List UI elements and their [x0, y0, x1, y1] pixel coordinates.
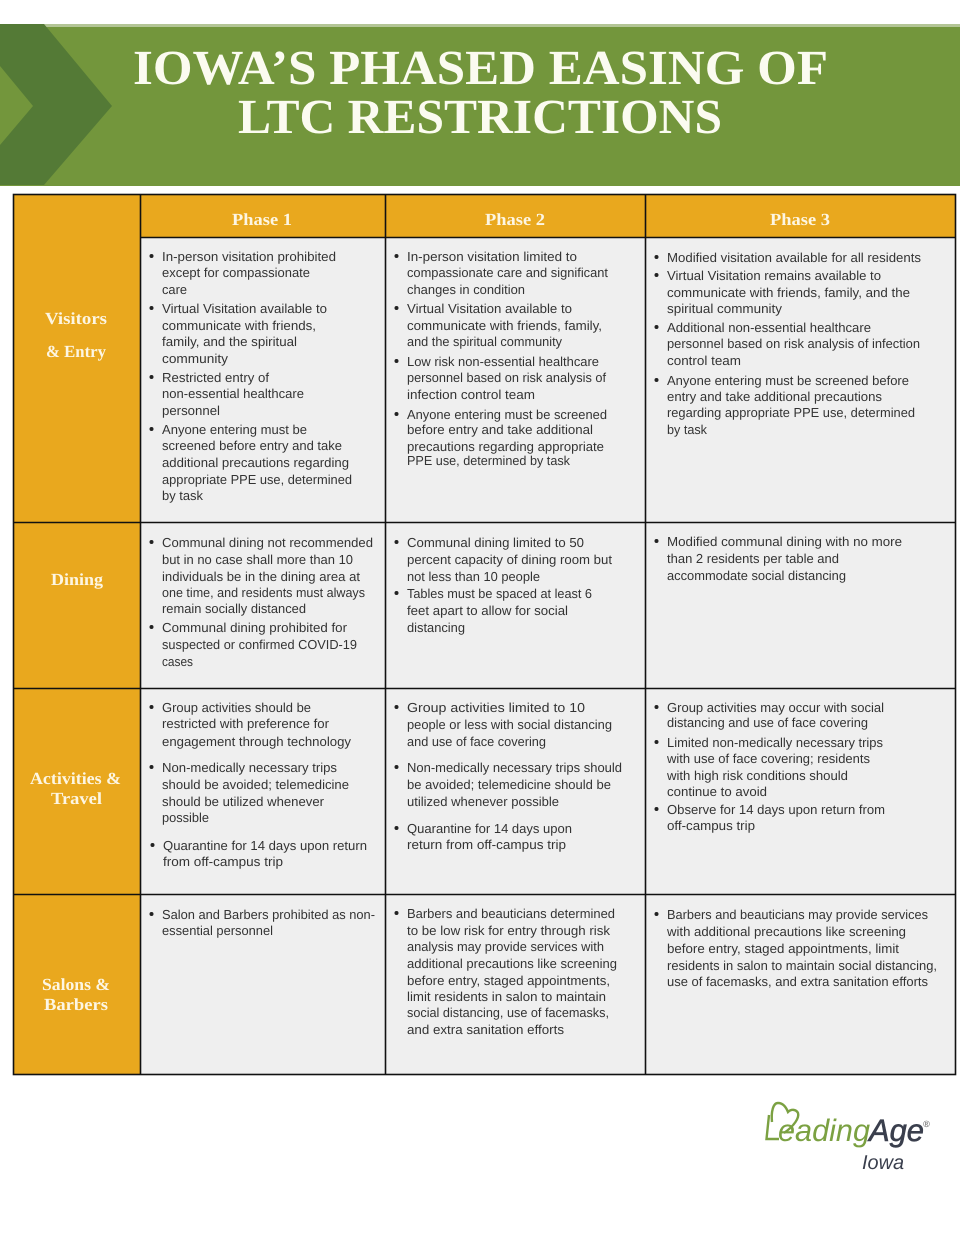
salons phase 2: to be low risk for entry through risk — [407, 923, 610, 938]
activities phase 2: and use of face covering — [407, 734, 546, 749]
dining phase 1: cases — [162, 654, 193, 669]
visitors phase 2: Low risk non-essential healthcare — [407, 354, 599, 369]
visitors phase 3: Modified visitation available for all residents — [667, 250, 922, 265]
column headers: Phase 1 — [232, 210, 292, 229]
activities phase 3: with high risk conditions should — [666, 768, 848, 783]
dining phase 1: but in no case shall more than 10 — [162, 552, 353, 567]
visitors phase 3: Additional non-essential healthcare — [667, 320, 871, 335]
visitors phase 1: care — [162, 282, 187, 297]
row label: salons and barbers: Barbers — [44, 995, 108, 1014]
activities phase 1: from off-campus trip — [163, 854, 283, 869]
table grid — [13, 194, 956, 1075]
dining phase 2: Tables must be spaced at least 6 — [407, 586, 592, 601]
visitors phase 1: except for compassionate — [162, 265, 310, 280]
row label: activities and travel — [30, 769, 121, 808]
dining phase 1 — [150, 535, 373, 669]
visitors phase 3: communicate with friends, family, and the — [667, 285, 910, 300]
visitors phase 2: PPE use, determined by task — [407, 453, 570, 468]
visitors phase 2: In-person visitation limited to — [407, 249, 577, 264]
visitors phase 1: In-person visitation prohibited — [162, 249, 336, 264]
row label: visitors and entry: Visitors — [45, 309, 107, 328]
visitors phase 3: regarding appropriate PPE use, determined — [667, 405, 915, 420]
visitors phase 2 — [394, 249, 608, 468]
salons phase 2: analysis may provide services with — [407, 939, 604, 954]
icon: chevron — [0, 24, 112, 185]
activities phase 3: Observe for 14 days upon return from — [667, 802, 885, 817]
visitors phase 3: control team — [667, 353, 741, 368]
banner — [0, 24, 960, 186]
column headers — [232, 210, 830, 229]
visitors phase 1: Virtual Visitation available to — [162, 301, 327, 316]
dining phase 2: distancing — [407, 620, 465, 635]
row label: dining: Dining — [51, 570, 104, 589]
dining phase 1: one time, and residents must always — [162, 585, 365, 600]
activities phase 1: possible — [162, 810, 209, 825]
activities phase 3: distancing and use of face covering — [667, 715, 868, 730]
activities phase 2: return from off-campus trip — [407, 837, 566, 852]
activities phase 1 — [150, 700, 367, 869]
visitors phase 1: personnel — [162, 403, 220, 418]
column headers: Phase 2 — [485, 210, 545, 229]
salons phase 2: additional precautions like screening — [407, 956, 617, 971]
visitors phase 2: personnel based on risk analysis of — [407, 370, 606, 385]
visitors phase 1: Anyone entering must be — [162, 422, 307, 437]
visitors phase 1: family, and the spiritual — [162, 334, 297, 349]
activities phase 1: restricted with preference for — [162, 716, 330, 731]
salons phase 2: and extra sanitation efforts — [407, 1022, 565, 1037]
visitors phase 1: communicate with friends, — [162, 318, 316, 333]
row label: visitors and entry: & Entry — [46, 342, 106, 361]
salons phase 2: limit residents in salon to maintain — [407, 989, 606, 1004]
visitors phase 3 — [654, 250, 922, 437]
activities phase 3: with use of face covering; residents — [666, 751, 870, 766]
visitors phase 2: infection control team — [407, 387, 535, 402]
dining phase 1: remain socially distanced — [162, 601, 306, 616]
activities phase 2: Non-medically necessary trips should — [407, 760, 622, 775]
salons phase 3: use of facemasks, and extra sanitation efforts — [667, 974, 928, 989]
salons phase 1: essential personnel — [162, 923, 273, 938]
visitors phase 3: Anyone entering must be screened before — [667, 373, 909, 388]
dining phase 2: feet apart to allow for social — [407, 603, 568, 618]
visitors phase 1: by task — [162, 488, 203, 503]
logo: LeadingAge Iowa: Iowa — [862, 1152, 904, 1174]
activities phase 1: Non-medically necessary trips — [162, 760, 337, 775]
visitors phase 3: Virtual Visitation remains available to — [667, 268, 881, 283]
icon: heart and L — [766, 1103, 798, 1139]
visitors phase 3: entry and take additional precautions — [667, 389, 882, 404]
visitors phase 3: spiritual community — [667, 301, 783, 316]
activities phase 2: people or less with social distancing — [407, 717, 612, 732]
activities phase 3: continue to avoid — [667, 784, 767, 799]
visitors phase 1: community — [162, 351, 229, 366]
salons phase 3: Barbers and beauticians may provide services — [667, 907, 928, 922]
activities phase 2: utilized whenever possible — [407, 794, 559, 809]
title — [133, 40, 828, 144]
visitors phase 2: compassionate care and significant — [407, 265, 608, 280]
activities phase 1: Group activities should be — [162, 700, 311, 715]
dining phase 2: Communal dining limited to 50 — [407, 535, 584, 550]
salons phase 3: with additional precautions like screening — [666, 924, 906, 939]
visitors phase 2: precautions regarding appropriate — [407, 439, 604, 454]
visitors phase 1: screened before entry and take — [162, 438, 342, 453]
logo: LeadingAge Iowa: eading — [778, 1113, 870, 1148]
visitors phase 2: Virtual Visitation available to — [407, 301, 572, 316]
row label: salons and barbers: Salons & — [42, 975, 110, 994]
visitors phase 1: appropriate PPE use, determined — [162, 472, 352, 487]
dining phase 1: Communal dining prohibited for — [162, 620, 348, 635]
row label: activities and travel: Activities & — [30, 769, 121, 788]
visitors phase 2: before entry and take additional — [407, 422, 593, 437]
activities phase 2 — [394, 700, 622, 852]
logo: LeadingAge Iowa: Age — [867, 1113, 924, 1148]
dining phase 3: than 2 residents per table and — [667, 551, 839, 566]
column headers: Phase 3 — [770, 210, 830, 229]
activities phase 3: off-campus trip — [667, 818, 755, 833]
dining phase 3: Modified communal dining with no more — [667, 534, 902, 549]
activities phase 1: should be utilized whenever — [162, 794, 325, 809]
activities phase 1: engagement through technology — [162, 734, 351, 749]
salons phase 3: residents in salon to maintain social distancing, — [667, 958, 937, 973]
salons phase 2: Barbers and beauticians determined — [407, 906, 615, 921]
dining phase 3 — [654, 534, 902, 583]
dining phase 2 — [394, 535, 612, 635]
visitors phase 1: additional precautions regarding — [162, 455, 349, 470]
logo: LeadingAge Iowa — [766, 1103, 930, 1174]
activities phase 2: Quarantine for 14 days upon — [407, 821, 572, 836]
salons phase 3 — [654, 907, 937, 989]
dining phase 1: individuals be in the dining area at — [162, 569, 360, 584]
salons phase 1: Salon and Barbers prohibited as non- — [162, 907, 375, 922]
visitors phase 3: by task — [667, 422, 707, 437]
salons phase 3: before entry, staged appointments, limit — [667, 941, 899, 956]
visitors phase 1: non-essential healthcare — [162, 386, 304, 401]
activities phase 1: should be avoided; telemedicine — [162, 777, 349, 792]
dining phase 2: percent capacity of dining room but — [407, 552, 612, 567]
visitors phase 1: Restricted entry of — [162, 370, 269, 385]
dining phase 1: suspected or confirmed COVID-19 — [162, 637, 357, 652]
salons phase 1 — [150, 907, 375, 938]
visitors phase 3: personnel based on risk analysis of infection — [667, 336, 920, 351]
title: LTC RESTRICTIONS — [238, 89, 722, 144]
visitors phase 2: changes in condition — [407, 282, 525, 297]
row label: salons and barbers — [42, 975, 110, 1014]
salons phase 2: before entry, staged appointments, — [407, 973, 610, 988]
activities phase 1: Quarantine for 14 days upon return — [163, 838, 367, 853]
dining phase 1: Communal dining not recommended — [162, 535, 373, 550]
visitors phase 2: and the spiritual community — [407, 334, 562, 349]
salons phase 2 — [394, 906, 617, 1037]
activities phase 2: be avoided; telemedicine should be — [407, 777, 611, 792]
visitors phase 1 — [150, 249, 352, 503]
activities phase 3 — [654, 700, 885, 833]
row label: visitors and entry — [45, 309, 107, 361]
visitors phase 2: Anyone entering must be screened — [407, 407, 607, 422]
title: IOWA’S PHASED EASING OF — [133, 40, 828, 95]
salons phase 2: social distancing, use of facemasks, — [407, 1005, 609, 1020]
logo: LeadingAge Iowa: ® — [923, 1119, 930, 1129]
row label: activities and travel: Travel — [51, 789, 102, 808]
activities phase 3: Limited non-medically necessary trips — [667, 735, 883, 750]
activities phase 3: Group activities may occur with social — [667, 700, 884, 715]
dining phase 3: accommodate social distancing — [667, 568, 846, 583]
visitors phase 2: communicate with friends, family, — [407, 318, 602, 333]
dining phase 2: not less than 10 people — [407, 569, 540, 584]
activities phase 2: Group activities limited to 10 — [407, 700, 585, 715]
